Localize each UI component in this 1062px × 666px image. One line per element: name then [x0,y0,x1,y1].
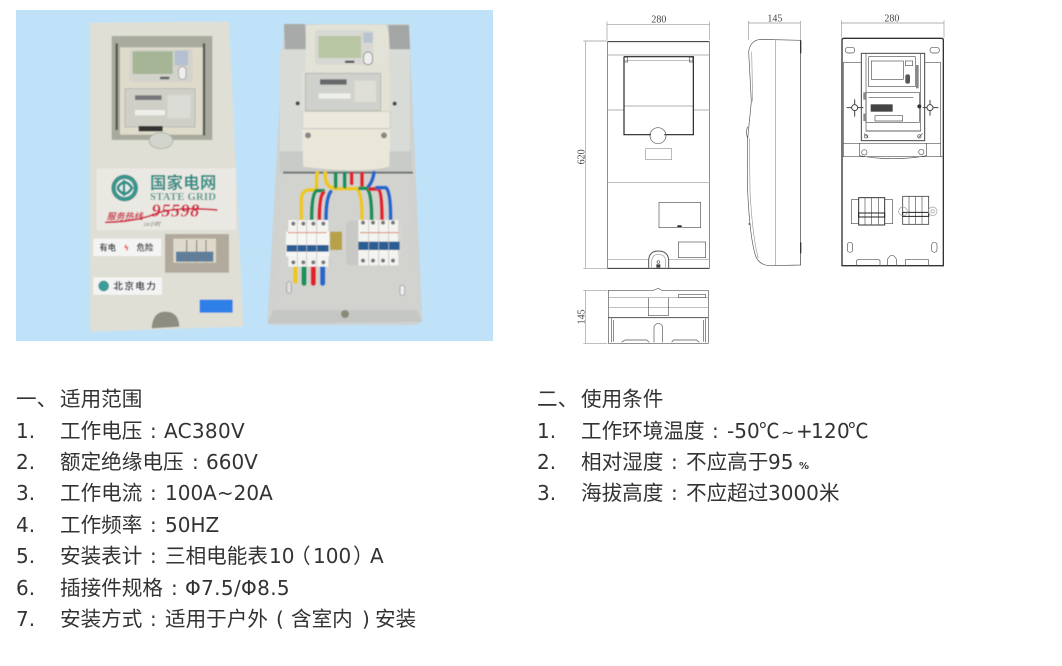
drawing: front view [576,14,709,268]
panel: technical drawings [576,14,944,343]
text block: operating conditions: 米 [819,476,840,506]
text block: operating conditions: ~ [781,423,794,442]
text block: operating conditions: % [799,461,809,472]
warning label [93,239,161,256]
text block: application scope: 适用于户外 [165,602,268,632]
text block: application scope: 含室内 [291,602,353,632]
text block: application scope: 4. [16,513,35,537]
text block: operating conditions: 120 [811,419,850,443]
text block: application scope: 1. [16,419,35,443]
state grid label: 24小时 [143,221,162,228]
state grid label: 国家电网 [150,169,217,193]
text block: operating conditions: 3. [537,481,556,505]
text block: application scope: Φ7.5/Φ8.5 [185,576,290,600]
dimension: height 620: 620 [576,149,587,164]
text block: operating conditions [537,382,869,506]
dimension: width 280 [841,14,944,38]
text block: operating conditions: ℃ [759,414,780,444]
text block: operating conditions: 不应高于 [686,445,768,475]
heading: operating conditions: 使用条件 [581,382,663,412]
meter window [112,36,212,149]
text block: operating conditions: 2. [537,450,556,474]
heading: application scope: 一、 [16,382,57,412]
dimension: width 280: 280 [651,14,666,25]
text block: application scope: 三相电能表 [165,539,268,569]
dimension: depth 145: 145 [576,309,587,324]
text block: application scope: : [150,481,157,505]
text block: application scope: 10 [269,544,294,568]
dimension: depth 145 [748,14,801,40]
Beijing power label [93,277,162,295]
text block: application scope: ） [353,539,374,569]
Beijing power label: 北京电力 [113,278,157,292]
dimension: height 620 [576,41,607,268]
text block: operating conditions: : [671,481,678,505]
dimension: width 280: 280 [884,14,899,25]
text block: application scope: ) [362,607,370,631]
warning label: ϟ [124,243,129,253]
text block: application scope: : [171,576,178,600]
text block: application scope: : [150,607,157,631]
text block: application scope: 安装方式 [60,602,142,632]
electricity meter [302,25,390,170]
text block: application scope: : [150,513,157,537]
text block: operating conditions: 工作环境温度 [581,414,705,444]
right breaker [346,219,402,266]
text block: application scope: 2. [16,450,35,474]
drawing: side view [746,14,801,266]
text block: application scope: A [370,544,384,568]
lock notch [152,312,179,328]
text block: operating conditions: 95 [768,450,793,474]
state grid label: STATE GRID [150,192,216,203]
text block: application scope: 7. [16,607,35,631]
text block: operating conditions: 不应超过 [686,476,768,506]
text block: application scope: 660V [206,450,258,474]
breaker window [165,234,229,273]
drawing: bottom view [576,288,708,343]
text block: application scope: 100 [313,544,351,568]
photo: open meter box [267,24,422,325]
meter outline [859,53,927,159]
text block: application scope: 6. [16,576,35,600]
text block: application scope: 安装 [375,602,416,632]
left breaker [286,220,329,267]
text block: application scope: 5. [16,544,35,568]
right breaker outline [899,196,937,224]
text block: application scope: ( [276,607,284,631]
dimension: width 280 [607,14,709,40]
text block: application scope: : [192,450,199,474]
text block: application scope: 工作电流 [60,476,142,506]
state grid label [97,168,236,230]
text block: application scope: 3. [16,481,35,505]
wires [295,173,391,283]
text block: application scope: 插接件规格 [60,571,163,601]
text block: application scope: 工作电压 [60,414,142,444]
warning label: 危险 [137,242,154,254]
text block: operating conditions: 3000 [768,481,819,505]
text block: application scope: : [150,419,157,443]
text block: operating conditions: : [712,419,719,443]
text block: application scope: 额定绝缘电压 [60,445,184,475]
text block: operating conditions: + [796,419,813,443]
text block: application scope: AC380V [164,419,245,443]
drawing: open box view [841,14,944,266]
heading: application scope: 适用范围 [60,382,142,412]
blue sticker [200,300,233,313]
text block: application scope: 工作频率 [60,508,142,538]
dimension: depth 145: 145 [767,14,782,25]
state grid label: 95598 [152,201,200,221]
warning label: 有电 [99,242,117,254]
state grid label: 服务热线 [107,209,144,222]
brass terminal [330,232,342,250]
text block: operating conditions: 相对湿度 [581,445,663,475]
text block: operating conditions: 1. [537,419,556,443]
text block: operating conditions: : [671,450,678,474]
left breaker outline [851,198,893,225]
text block: application scope [16,382,416,632]
text block: operating conditions: -50 [727,419,760,443]
heading: operating conditions: 二、 [537,382,578,412]
text block: operating conditions: ℃ [848,414,869,444]
text block: application scope: 安装表计 [60,539,142,569]
text block: application scope: 100A~20A [165,481,273,505]
text block: application scope: （ [290,539,311,569]
text block: application scope: 50HZ [165,513,219,537]
text block: application scope: : [150,544,157,568]
photo: closed meter box [90,22,243,332]
panel: product photos [16,10,493,341]
text block: operating conditions: 海拔高度 [581,476,663,506]
